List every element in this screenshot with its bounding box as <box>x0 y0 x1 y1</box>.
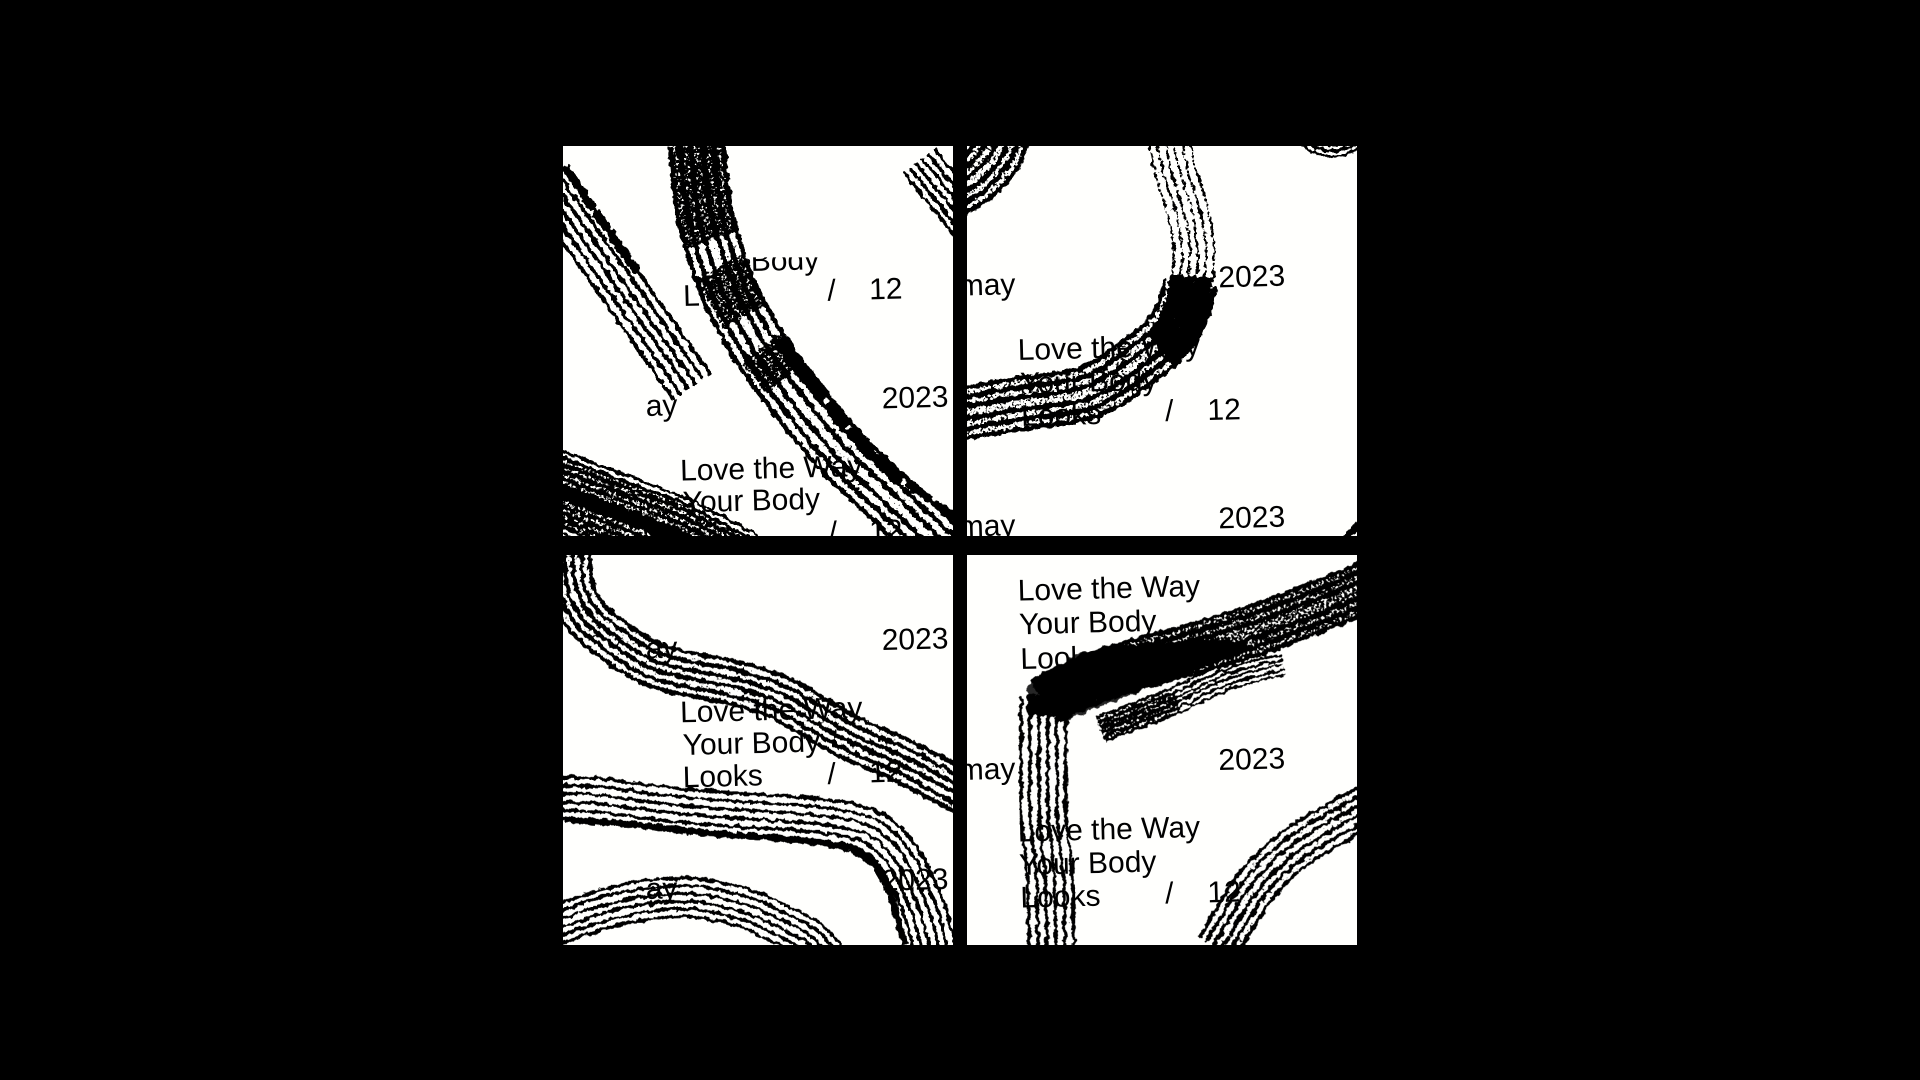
brush: middle band heavy lower edge <box>565 820 905 945</box>
text: title repeat line two: Your Body <box>1019 845 1157 882</box>
brush strokes <box>552 552 965 965</box>
brush: main curve dark knots <box>718 267 785 380</box>
text: 2023 lower: 2023 <box>881 863 949 898</box>
text: title line two: Your Body <box>682 725 820 762</box>
brush: left diagonal heavy edge <box>565 167 638 273</box>
brush: black knot <box>1160 277 1192 350</box>
brush: lower right arc wash <box>1217 805 1370 948</box>
text: ay lower: ay <box>645 872 678 906</box>
text: ay: ay <box>645 389 678 423</box>
text: 12: 12 <box>869 272 903 306</box>
text: 12: 12 <box>1207 393 1241 427</box>
text: slash: / <box>827 758 837 791</box>
text: title repeat: Love the Way <box>680 450 863 488</box>
brush: main curve heavy edge <box>782 340 955 517</box>
panel: top left tile <box>563 146 953 536</box>
brush: light descending section <box>1170 143 1194 287</box>
text: slash: / <box>1165 877 1175 910</box>
brush strokes <box>538 143 972 570</box>
text: Looks fragment: L <box>683 280 700 313</box>
text: title line three: Looks <box>1020 641 1101 676</box>
brush: left diagonal <box>545 178 692 387</box>
brush: main curve <box>697 143 965 570</box>
brush: dark section wash <box>953 283 1190 415</box>
text: title repeat line one: Love the Way <box>1017 811 1200 849</box>
text: title line one: Love the Way <box>1017 570 1200 608</box>
text: upper fragment, Body: Body <box>750 243 820 278</box>
text: title line two: Your Body <box>1019 605 1157 641</box>
text: 2023 lower: 2023 <box>1218 501 1286 535</box>
brush: upper wave <box>568 552 965 793</box>
text: 12: 12 <box>1207 875 1241 909</box>
brush: top left arc wash <box>950 133 1003 193</box>
brush: corner fragment <box>1343 523 1360 540</box>
brush: lower branch wash <box>1100 700 1177 730</box>
text: 12: 12 <box>869 755 903 789</box>
brush: bottom arch <box>552 897 832 965</box>
brush strokes <box>1027 585 1370 948</box>
text: title line one: Love the Way <box>1017 329 1200 367</box>
text: 2023: 2023 <box>881 381 949 415</box>
brush: main curve dark top <box>697 143 712 240</box>
text: slash: / <box>1165 395 1175 428</box>
panel: bottom left tile <box>563 555 953 945</box>
brush: upper wave wash <box>568 552 965 793</box>
brush: top right arc <box>1303 138 1360 151</box>
brush: bottom left dark wash <box>538 483 742 570</box>
text: 2023: 2023 <box>1218 742 1286 777</box>
brush: lower right arc <box>1217 805 1370 948</box>
brush: top left arc <box>950 133 1003 193</box>
text: 2023: 2023 <box>1218 260 1286 294</box>
brush: rising band wash <box>1045 585 1370 702</box>
brush: light section fade <box>1170 143 1194 287</box>
text: title line one: Love the Way <box>680 692 863 729</box>
brush strokes <box>950 133 1360 540</box>
brush: lower branch <box>1100 662 1283 730</box>
text: ay: ay <box>645 632 678 665</box>
brush: top right <box>919 161 972 227</box>
brush: vertical band <box>1043 695 1052 948</box>
text: slash: / <box>827 274 837 308</box>
brush: dark junction <box>1027 640 1253 718</box>
brush: dark sweeping section <box>953 283 1190 415</box>
panel: bottom right tile <box>967 555 1357 945</box>
brush: bottom left dense <box>538 483 742 570</box>
panel: top right tile <box>967 146 1357 536</box>
brush: main curve light wash <box>697 143 965 570</box>
text: 2023: 2023 <box>881 622 949 657</box>
text: title line two: Your Body <box>1020 364 1158 400</box>
brush: middle band <box>552 798 935 955</box>
text: title repeat line three: Looks <box>1020 880 1101 915</box>
text: title line three: Looks <box>682 759 763 794</box>
text: title line two: Your Body <box>682 483 820 519</box>
text: title line three: Looks <box>1021 398 1102 433</box>
brush: rising band <box>1045 585 1370 702</box>
